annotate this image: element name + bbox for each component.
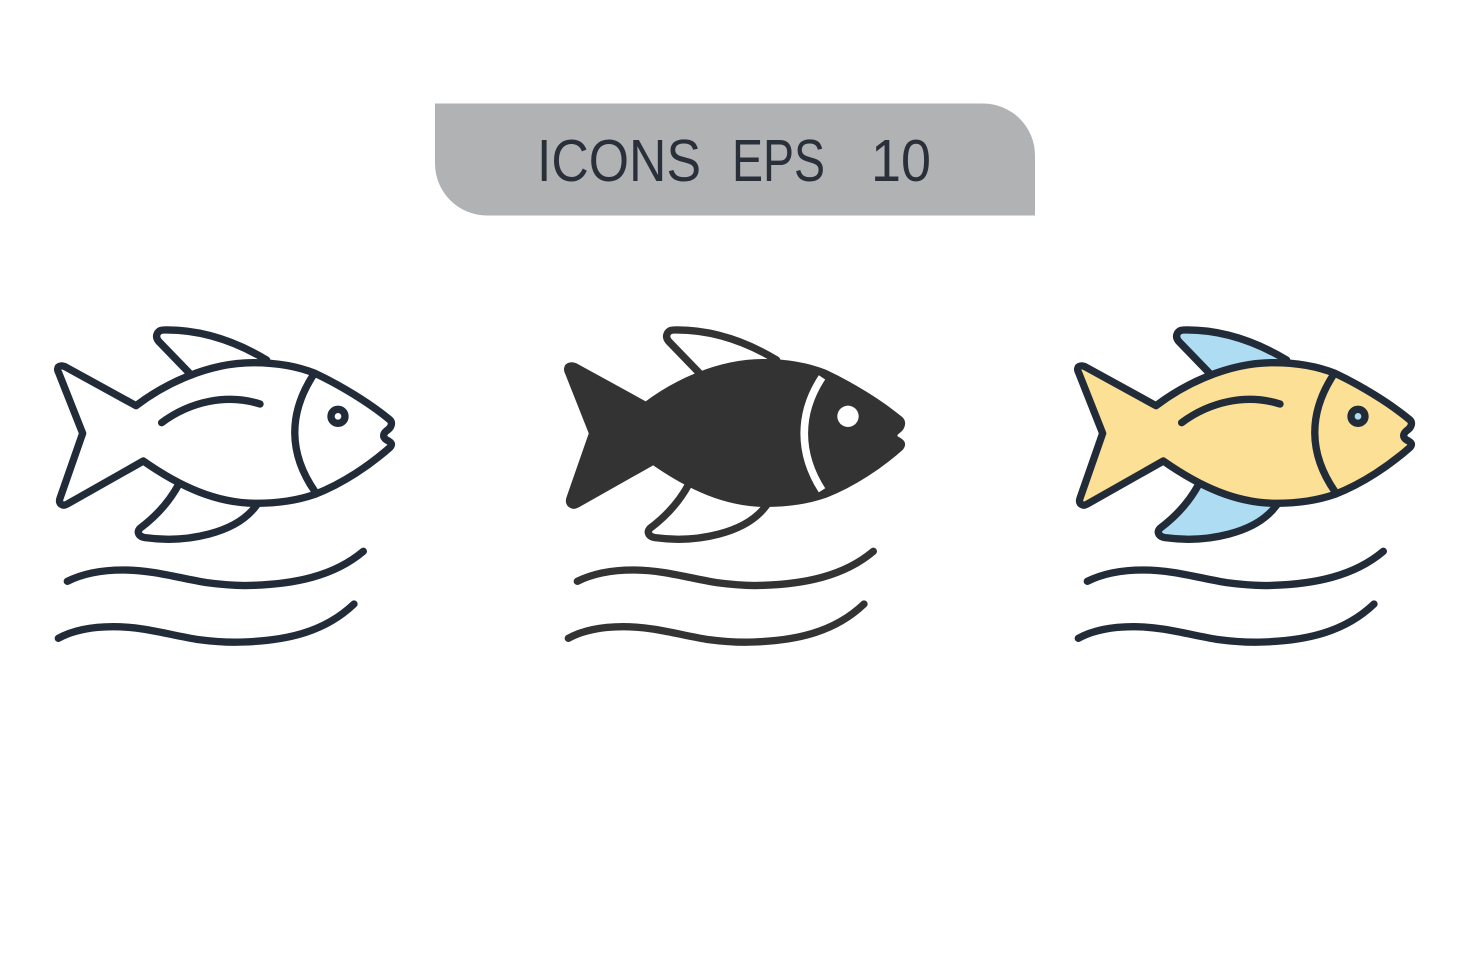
eye (837, 406, 859, 427)
lateral line (162, 399, 260, 423)
top fin (1177, 330, 1287, 373)
water waves (1078, 551, 1383, 642)
top fin (157, 330, 267, 373)
body outline (58, 363, 391, 505)
gill line (1315, 375, 1335, 492)
icon: solid fish (568, 330, 901, 642)
eye (331, 409, 345, 423)
gill line (295, 375, 315, 492)
body silhouette (568, 363, 901, 505)
heading text: 10 (871, 128, 931, 194)
icon: coloured fish (1078, 330, 1411, 642)
bottom fin (648, 485, 767, 539)
water waves (568, 551, 873, 642)
heading text (537, 128, 931, 194)
heading text: EPS (732, 128, 825, 194)
top fin (667, 330, 777, 373)
icon: outline fish (58, 330, 391, 642)
eye (1351, 409, 1365, 423)
gill line (804, 377, 822, 490)
bottom fin (1158, 485, 1277, 539)
water waves (58, 551, 363, 642)
heading text: ICONS (537, 128, 701, 194)
bottom fin (138, 485, 257, 539)
lateral line (1182, 399, 1280, 423)
body outline (1078, 363, 1411, 505)
heading banner (435, 104, 1035, 216)
